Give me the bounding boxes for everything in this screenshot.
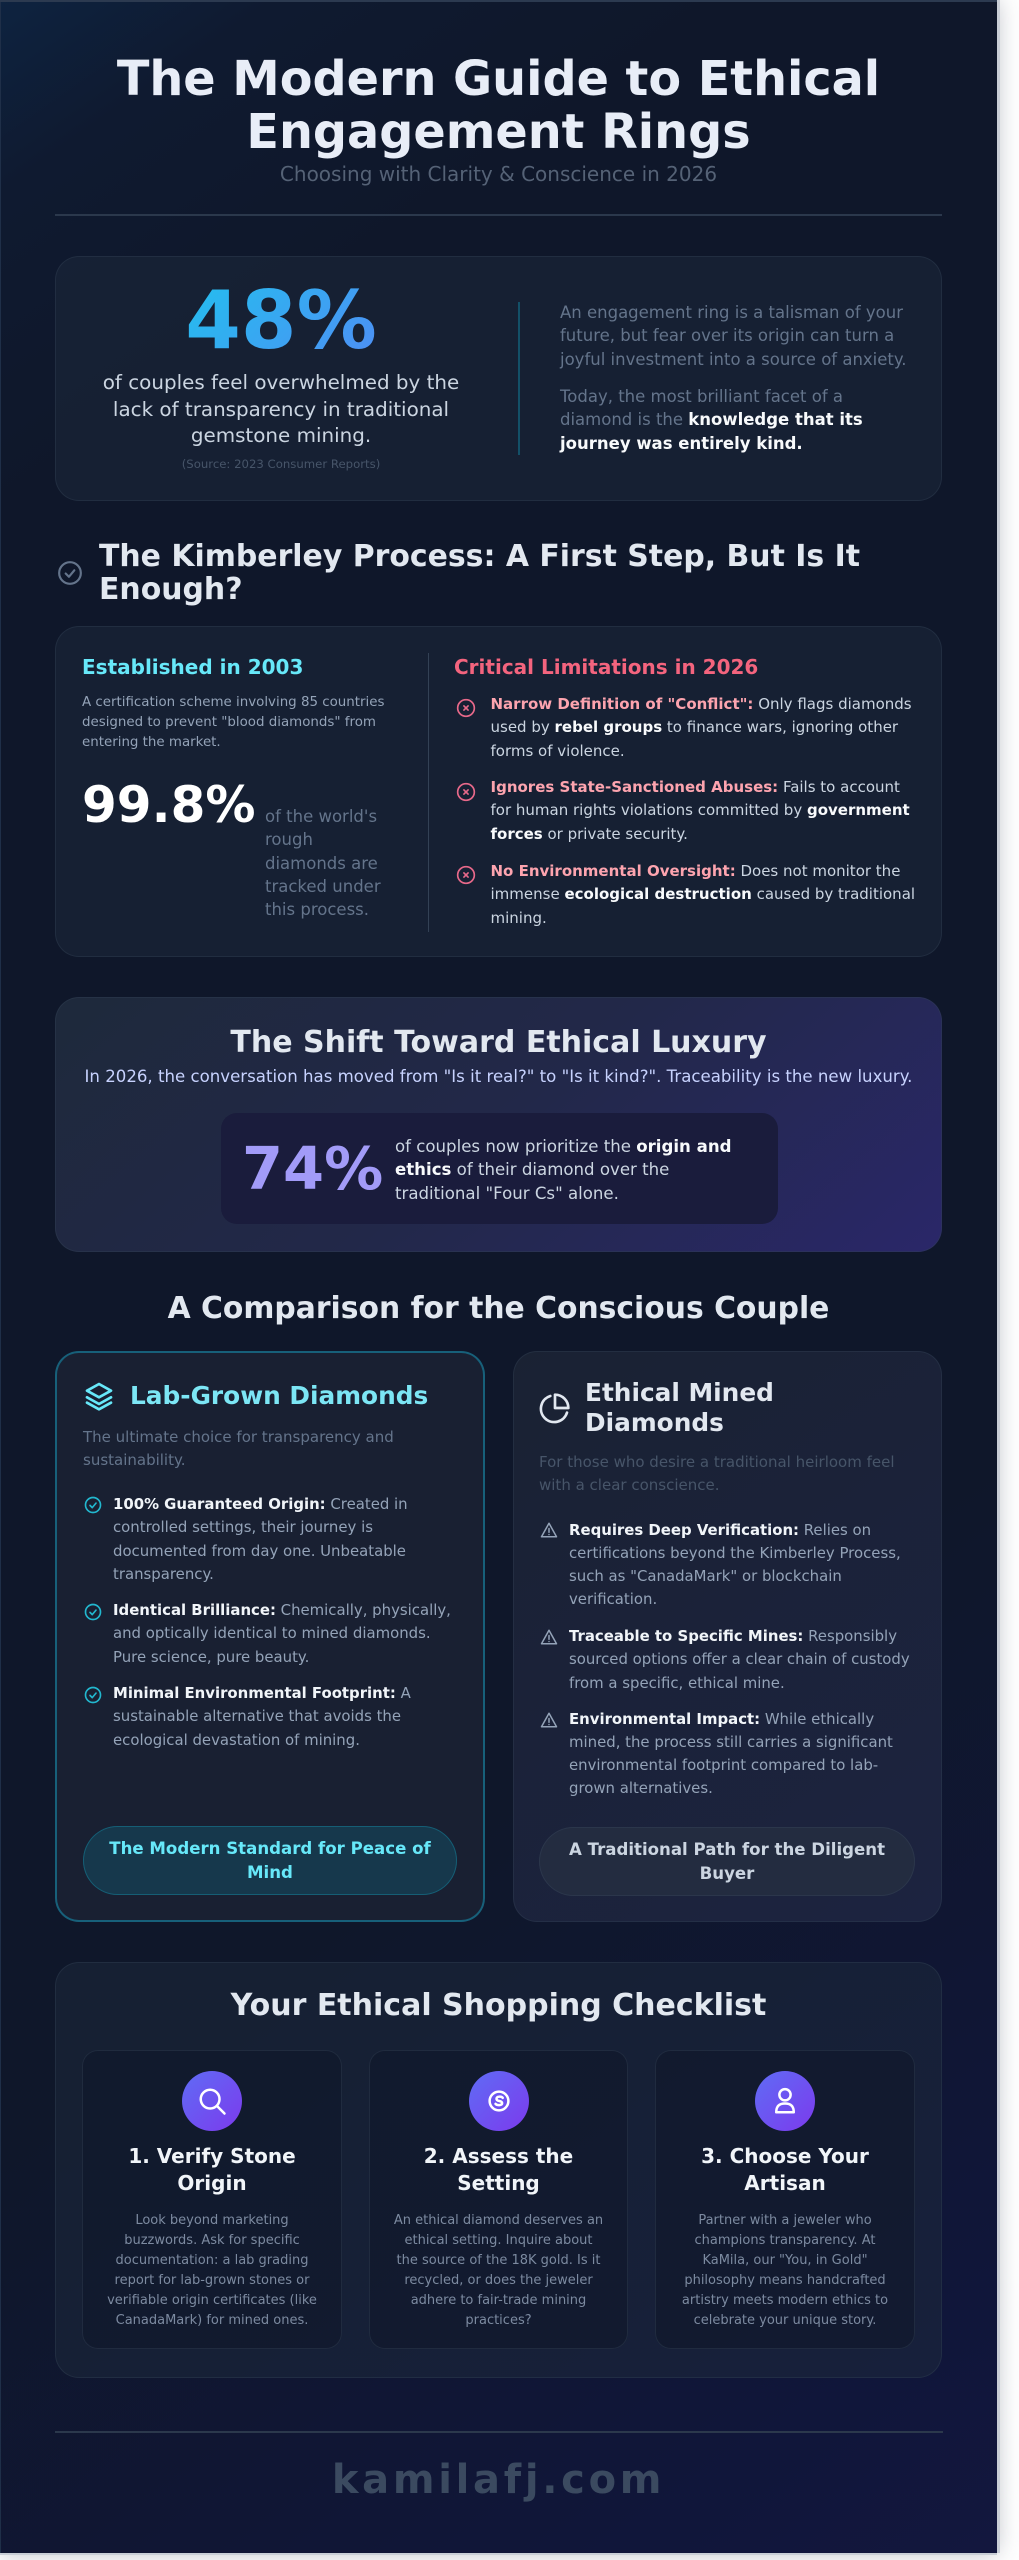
- badge: [539, 1827, 915, 1896]
- icon: x circle: [456, 866, 476, 884]
- established description: [82, 695, 384, 750]
- card title: Lab-Grown Diamonds: [130, 1381, 428, 1410]
- step text: CanadaMark) for mined ones.: [116, 2313, 308, 2328]
- step title: Setting: [457, 2170, 540, 2194]
- limitation 2: for human rights violations committed by government: [490, 801, 910, 819]
- icon: warning: [540, 1630, 558, 1644]
- icon: x circle: [456, 698, 476, 718]
- heading: comparison: A Comparison for the Conscious Couple: [168, 1291, 829, 1326]
- step text: buzzwords. Ask for specific: [124, 2233, 300, 2248]
- stat caption: of the world's: [265, 807, 377, 826]
- card subtitle: sustainability.: [83, 1451, 186, 1469]
- panel: shift toward ethical luxury: [55, 997, 942, 1252]
- card subtitle: [83, 1428, 394, 1469]
- step text: documentation: a lab grading: [116, 2253, 308, 2268]
- panel: ethical mined diamonds: [513, 1351, 942, 1922]
- consideration 2: Traceable to Specific Mines: Responsibly: [569, 1627, 897, 1645]
- stat caption: [103, 371, 459, 447]
- consideration 3: mined, the process still carries a significant: [569, 1733, 893, 1751]
- card subtitle: [539, 1453, 894, 1494]
- benefit 3: ecological devastation of mining.: [113, 1731, 360, 1749]
- limitation 1: Narrow Definition of "Conflict": Only flags diamonds: [490, 695, 912, 713]
- title: Engagement Rings: [246, 105, 751, 160]
- icon: x circle: [456, 782, 476, 802]
- step title: 1. Verify Stone: [128, 2144, 296, 2168]
- benefit 3: sustainable alternative that avoids the: [113, 1707, 401, 1725]
- stat caption: tracked under: [265, 877, 381, 896]
- intro text highlight: journey was entirely kind.: [560, 434, 803, 453]
- intro text highlight: Today, the most brilliant facet of a: [560, 387, 843, 406]
- card title: Ethical Mined: [585, 1378, 774, 1407]
- step title: 3. Choose Your: [701, 2144, 869, 2168]
- consideration 3: environmental footprint compared to lab-: [569, 1756, 878, 1774]
- stat caption: ethics of their diamond over the: [395, 1160, 669, 1179]
- step text: adhere to fair-trade mining: [411, 2293, 586, 2308]
- consideration 1: verification.: [569, 1590, 657, 1608]
- limitation 3: No Environmental Oversight: Does not monitor the: [490, 862, 900, 880]
- stat caption: traditional "Four Cs" alone.: [395, 1184, 619, 1203]
- step title: [701, 2144, 869, 2194]
- icon: coin: [468, 2071, 528, 2131]
- badge: A Traditional Path for the Diligent: [569, 1840, 885, 1859]
- heading: Your Ethical Shopping Checklist: [231, 1988, 766, 2023]
- subheading: In 2026, the conversation has moved from "Is it real?" to "Is it kind?". Traceability is the new luxury.: [85, 1067, 912, 1086]
- source note: (Source: 2023 Consumer Reports): [182, 457, 380, 471]
- limitation 3: mining.: [490, 909, 547, 927]
- panel: Kimberley details: [55, 626, 942, 957]
- icon: pie chart: [540, 1393, 570, 1424]
- icon: check: [84, 1686, 102, 1704]
- consideration 3: grown alternatives.: [569, 1779, 713, 1797]
- consideration 1: such as "CanadaMark" or blockchain: [569, 1567, 842, 1585]
- benefit 2: Identical Brilliance: Chemically, physically,: [113, 1601, 451, 1619]
- limitation 1: forms of violence.: [490, 742, 625, 760]
- benefit 1: controlled settings, their journey is: [113, 1518, 373, 1536]
- step text: the source of the 18K gold. Is it: [397, 2253, 600, 2268]
- step text: artistry meets modern ethics to: [682, 2293, 888, 2308]
- step text: celebrate your unique story.: [694, 2313, 876, 2328]
- benefit 3: [113, 1684, 411, 1749]
- established description: designed to prevent "blood diamonds" from: [82, 715, 376, 730]
- step text: verifiable origin certificates (like: [107, 2293, 317, 2308]
- benefit 2: [113, 1601, 451, 1666]
- benefit 1: documented from day one. Unbeatable: [113, 1542, 406, 1560]
- intro text: future, but fear over its origin can turn a: [560, 326, 894, 345]
- stat caption: [395, 1137, 732, 1203]
- limitation 2: forces or private security.: [490, 825, 688, 843]
- icon: warning: [540, 1712, 558, 1728]
- step title: [424, 2144, 573, 2194]
- limitation 1: used by rebel groups to finance wars, ignoring other: [490, 718, 898, 736]
- card title: [585, 1378, 774, 1437]
- title: [117, 52, 880, 160]
- stat caption: gemstone mining.: [191, 424, 371, 447]
- limitation 3: immense ecological destruction caused by traditional: [490, 885, 915, 903]
- consideration 3: Environmental Impact: While ethically: [569, 1710, 874, 1728]
- stat caption: of couples feel overwhelmed by the: [103, 371, 459, 394]
- footer brand: kamilafj.com: [332, 2457, 665, 2503]
- heading: Kimberley Process: Enough?: [99, 572, 243, 607]
- established description: A certification scheme involving 85 countries: [82, 695, 384, 710]
- benefit 1: [113, 1495, 408, 1583]
- step text: [682, 2213, 888, 2328]
- step card 2: [369, 2050, 628, 2349]
- consideration 1: Requires Deep Verification: Relies on: [569, 1520, 871, 1538]
- icon: search: [182, 2071, 242, 2131]
- heading: The Shift Toward Ethical Luxury: [230, 1025, 767, 1060]
- stat: 48%: 48%: [185, 274, 377, 367]
- step text: report for lab-grown stones or: [115, 2273, 309, 2288]
- step text: practices?: [465, 2313, 532, 2328]
- limitation 2: Ignores State-Sanctioned Abuses: Fails to account: [490, 778, 900, 796]
- benefit 1: transparency.: [113, 1565, 214, 1583]
- step card 1: [82, 2050, 342, 2349]
- step text: KaMila, our "You, in Gold": [702, 2253, 868, 2268]
- intro text: An engagement ring is a talisman of your: [560, 303, 903, 322]
- step title: [128, 2144, 296, 2194]
- step title: 2. Assess the: [424, 2144, 573, 2168]
- intro text: [560, 303, 907, 369]
- stat: 74%: 74%: [242, 1134, 383, 1203]
- step text: champions transparency. At: [695, 2233, 875, 2248]
- step title: Artisan: [744, 2170, 826, 2194]
- panel: ethical shopping checklist: [55, 1962, 942, 2378]
- title: The Modern Guide to Ethical: [117, 52, 880, 107]
- intro text highlight: [559, 387, 863, 453]
- card subtitle: with a clear conscience.: [539, 1476, 719, 1494]
- stat caption: rough: [265, 830, 313, 849]
- step text: [107, 2213, 317, 2328]
- card subtitle: For those who desire a traditional heirloom feel: [539, 1453, 894, 1471]
- card subtitle: The ultimate choice for transparency and: [83, 1428, 394, 1446]
- intro text highlight: diamond is the knowledge that its: [560, 410, 863, 429]
- heading: limitations: Critical Limitations in 2026: [454, 655, 758, 679]
- stat: 99.8%: 99.8%: [82, 776, 255, 834]
- established description: entering the market.: [82, 735, 221, 750]
- consideration 2: [569, 1627, 910, 1692]
- panel: 48 percent intro: [55, 256, 942, 501]
- stat caption: this process.: [265, 900, 369, 919]
- stat caption: [265, 807, 381, 919]
- consideration 1: certifications beyond the Kimberley Process,: [569, 1544, 901, 1562]
- panel: lab-grown diamonds: [55, 1351, 485, 1922]
- limitation 3: [490, 862, 915, 927]
- badge: Mind: [247, 1862, 293, 1882]
- card title: Diamonds: [585, 1408, 724, 1437]
- consideration 1: [569, 1520, 901, 1608]
- step text: An ethical diamond deserves an: [394, 2213, 603, 2228]
- heading: Kimberley Process: [99, 539, 860, 607]
- icon: person: [755, 2071, 815, 2131]
- icon: check: [84, 1604, 102, 1620]
- consideration 2: sourced options offer a clear chain of custody: [569, 1650, 910, 1668]
- limitation 2: [490, 778, 910, 843]
- step card 3: [655, 2050, 915, 2349]
- step text: recycled, or does the jeweler: [404, 2273, 593, 2288]
- badge: The Modern Standard for Peace of: [109, 1839, 431, 1858]
- benefit 3: Minimal Environmental Footprint: A: [113, 1684, 411, 1702]
- step text: philosophy means handcrafted: [684, 2273, 886, 2288]
- step text: [394, 2213, 603, 2328]
- stat caption: lack of transparency in traditional: [113, 398, 449, 420]
- stat caption: of couples now prioritize the origin and: [395, 1137, 732, 1156]
- step text: Look beyond marketing: [135, 2213, 289, 2228]
- benefit 2: and optically identical to mined diamonds.: [113, 1624, 431, 1642]
- icon: check: [84, 1496, 102, 1514]
- step text: ethical setting. Inquire about: [404, 2233, 592, 2248]
- benefit 1: 100% Guaranteed Origin: Created in: [113, 1495, 408, 1513]
- stat caption: diamonds are: [265, 854, 378, 873]
- subtitle: Choosing with Clarity & Conscience in 2026: [280, 162, 717, 186]
- icon: layers: [86, 1382, 112, 1411]
- stat box: 74%: [221, 1113, 778, 1224]
- heading: established: Established in 2003: [82, 655, 303, 679]
- badge: [83, 1826, 457, 1895]
- benefit 2: Pure science, pure beauty.: [113, 1648, 309, 1666]
- limitation 1: [490, 695, 912, 760]
- heading: Kimberley Process: The Kimberley Process: A First Step, But Is It: [99, 539, 860, 574]
- step text: Partner with a jeweler who: [698, 2213, 872, 2228]
- badge: Buyer: [700, 1864, 754, 1882]
- consideration 2: from a specific, ethical mine.: [569, 1674, 785, 1692]
- icon: check circle: [58, 561, 82, 585]
- step title: Origin: [177, 2170, 247, 2194]
- consideration 3: [569, 1710, 893, 1797]
- icon: warning: [540, 1522, 558, 1538]
- intro text: joyful investment into a source of anxiety.: [560, 350, 907, 369]
